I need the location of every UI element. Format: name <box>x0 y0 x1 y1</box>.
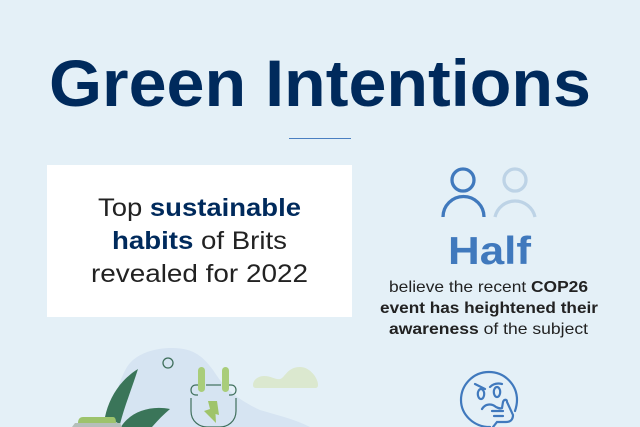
plant pot <box>78 417 116 423</box>
cloud <box>253 367 318 388</box>
icon: thinking face <box>461 372 517 427</box>
stat description <box>380 279 598 338</box>
description line 2: event has heightened their <box>380 300 598 317</box>
small circle <box>163 358 173 368</box>
plug <box>191 385 236 427</box>
stat: Half: Half <box>448 230 532 273</box>
illustration: plug and plant <box>72 348 318 427</box>
description line 3: awareness of the subject <box>389 321 589 338</box>
plant leaves <box>105 369 138 424</box>
description line 1: believe the recent COP26 <box>389 279 588 296</box>
title: Green Intentions <box>49 46 591 120</box>
background blob <box>112 348 310 427</box>
panel text: line 2: habits of Brits <box>112 227 287 255</box>
lightning bolt <box>204 401 219 423</box>
icon: two people <box>443 169 535 217</box>
panel text: line 3: revealed for 2022 <box>91 260 308 288</box>
panel text: line 1: Top sustainable <box>98 194 301 222</box>
plug prongs <box>198 367 205 392</box>
panel: top sustainable habits <box>47 165 352 317</box>
